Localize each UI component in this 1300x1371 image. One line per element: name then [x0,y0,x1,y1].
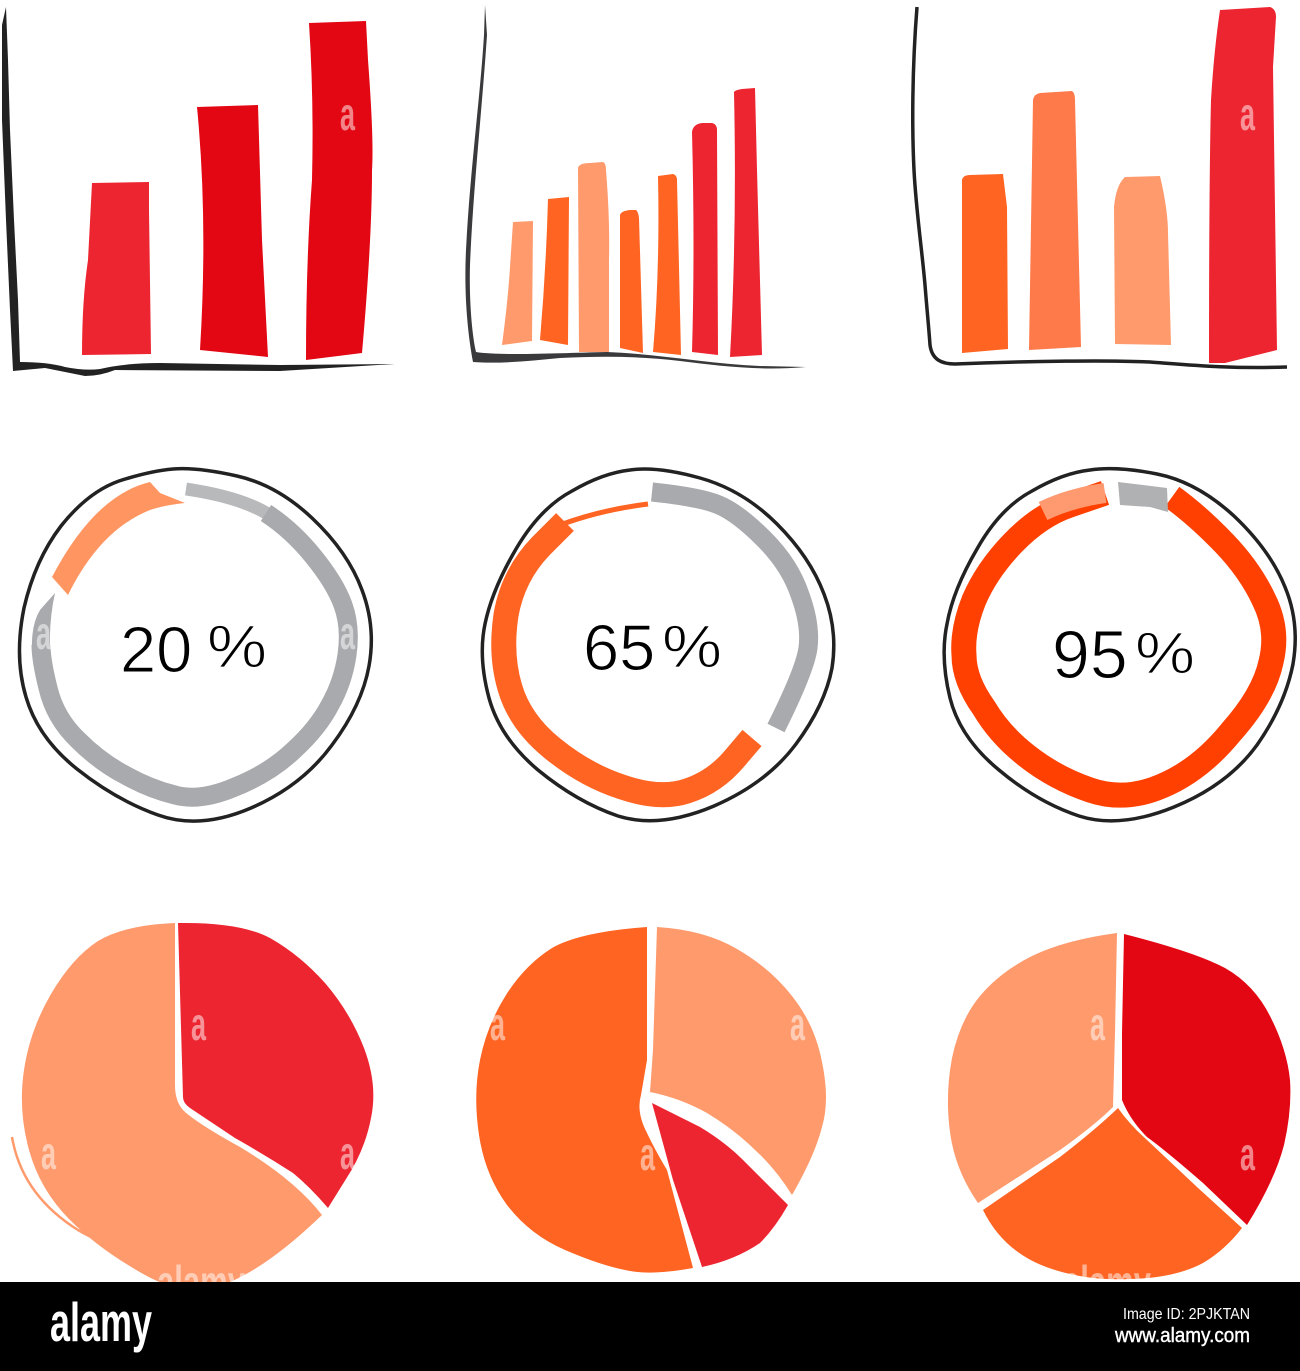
ring gauge: 95% [944,469,1295,821]
label: 65%: % [662,613,722,680]
watermark glyphs: a [340,607,355,659]
watermark glyphs: a [1090,998,1105,1050]
pie chart: three slices [948,933,1290,1279]
ring gauge: 20% [19,469,371,821]
pie chart: two slices [12,923,373,1290]
label: 95%: 95 [1052,617,1128,693]
website: www.alamy.com [1114,1325,1250,1347]
watermark glyphs: a [1240,1128,1255,1180]
label: 65%: 65 [583,611,655,684]
bar chart: four mixed bars [913,7,1287,368]
watermark glyphs: a [490,998,505,1050]
watermark glyphs: a [790,998,805,1050]
bar chart: seven mixed bars [465,5,806,368]
watermark glyphs: a [340,88,355,140]
label: 20%: % [207,613,267,680]
watermark glyphs: a [191,998,206,1050]
image id: Image ID: 2PJKTAN [1123,1306,1250,1323]
ring gauge: 65% [482,469,834,821]
pie chart: three slices [476,927,826,1273]
watermark glyphs: a [640,1128,655,1180]
label: 20%: 20 [120,613,192,686]
bar chart: three rising red bars [2,7,395,376]
watermark glyphs: a [340,1127,355,1179]
footer bar [0,1282,1300,1371]
watermark glyphs: a [1240,88,1255,140]
footer logo: alamy [50,1291,152,1353]
label: 95%: % [1135,621,1195,686]
watermark glyphs: a [36,607,51,659]
watermark glyphs: alamy [157,1256,245,1308]
watermark glyphs: alamy [1063,1256,1151,1308]
watermark glyphs: a [41,1127,56,1179]
